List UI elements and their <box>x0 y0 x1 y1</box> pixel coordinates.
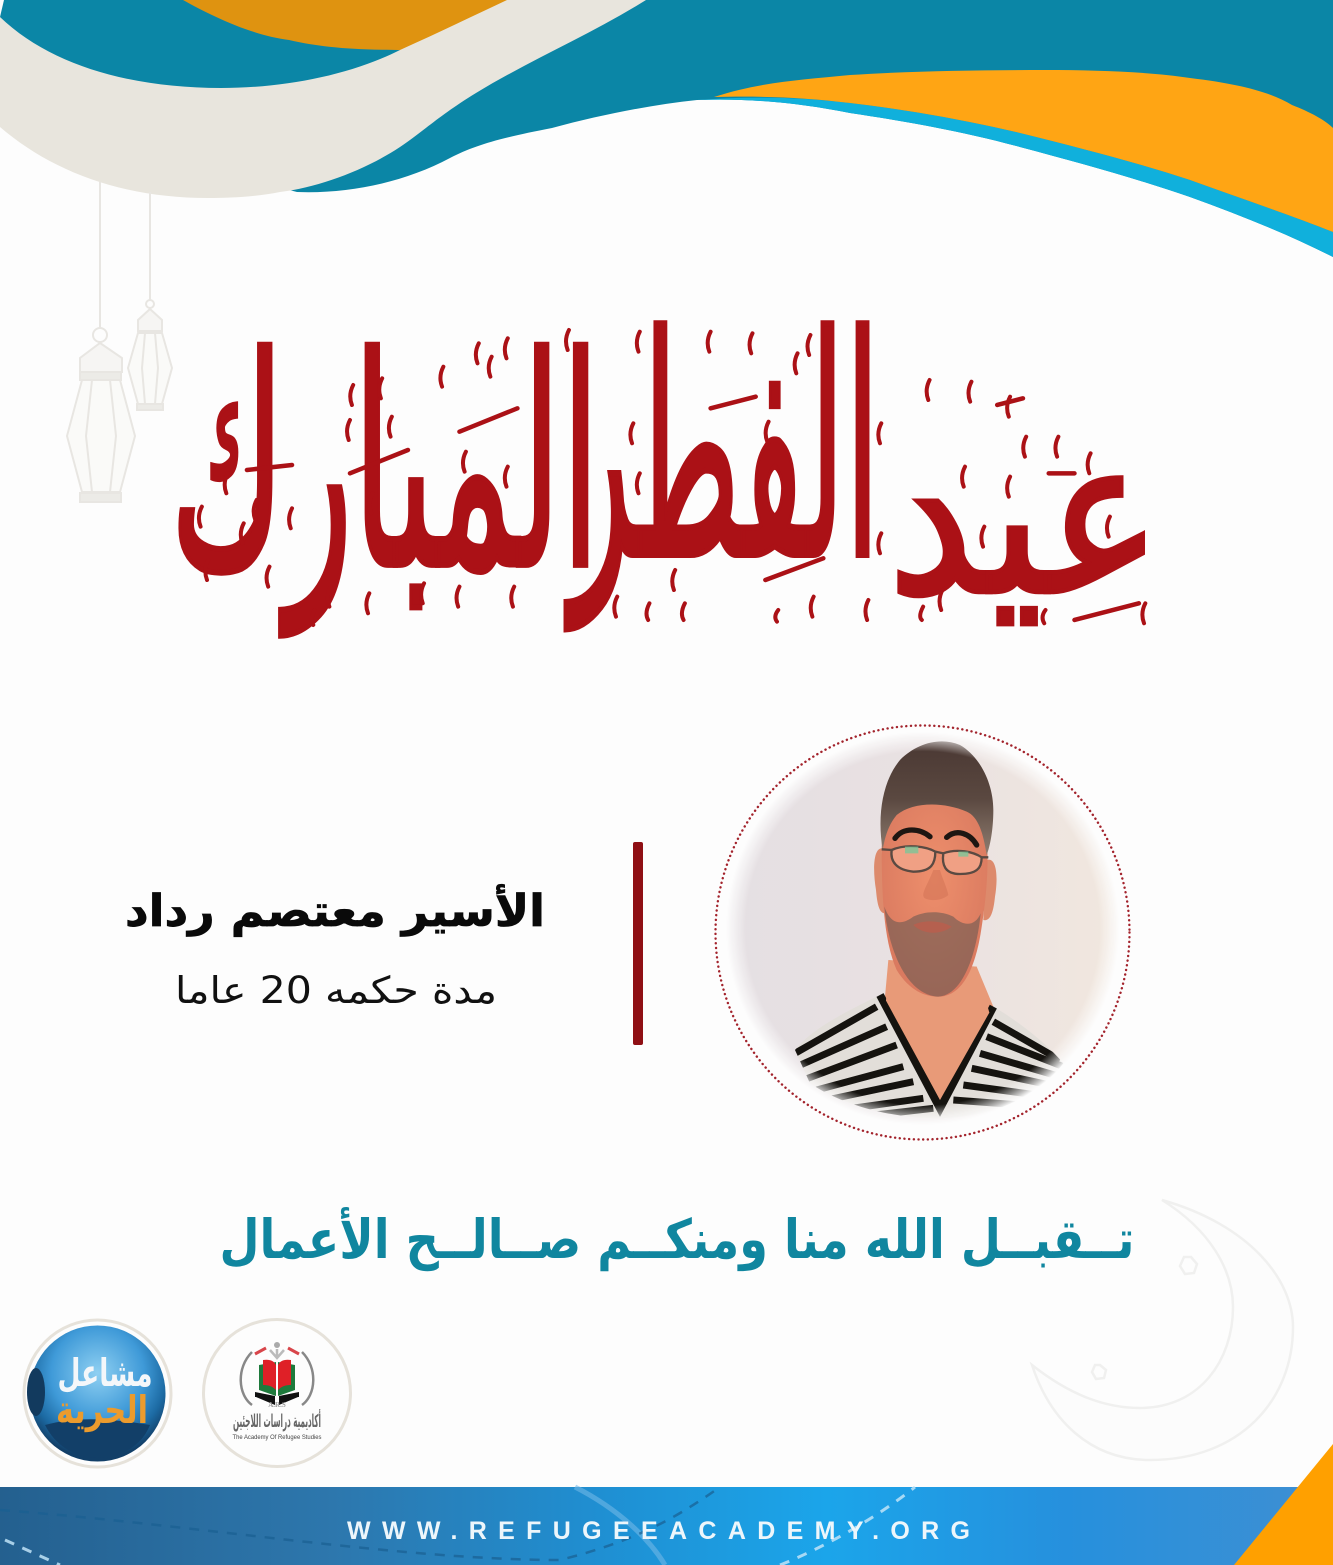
top wave: teal body <box>0 0 1333 257</box>
top wave: corner sliver <box>0 0 4 17</box>
word: al-fitr: الفطر <box>564 271 880 630</box>
title ornament marks <box>199 330 1145 625</box>
glasses <box>882 846 988 874</box>
logo: academy of refugee studies: A.R.S <box>268 1401 286 1409</box>
word: al-mubarak: المبارك <box>170 298 600 636</box>
glasses glints <box>905 847 968 857</box>
top wave: cyan ribbon <box>697 98 1333 257</box>
portrait photo <box>731 737 1114 1120</box>
crescent watermark <box>1032 1200 1293 1460</box>
divider bar <box>633 842 643 1045</box>
shirt <box>795 997 1063 1116</box>
logo: freedom torches: الحرية <box>56 1388 148 1432</box>
prisoner name: الأسير معتصم رداد <box>125 884 545 937</box>
logo: academy of refugee studies: أكاديمية دراسات اللاجئين <box>233 1409 321 1432</box>
face <box>882 797 988 997</box>
ears <box>874 848 885 913</box>
website address: WWW.REFUGEEACADEMY.ORG <box>347 1517 970 1545</box>
logo: freedom torches <box>24 1320 171 1467</box>
word: eid: عيد <box>888 389 1162 645</box>
footer corner triangle <box>1234 1444 1333 1565</box>
logo: academy of refugee studies <box>204 1320 350 1466</box>
sentence duration: مدة حكمه 20 عاما <box>175 969 497 1012</box>
closing greeting: تــقبــل الله منا ومنكــم صــالــح الأعمال <box>220 1207 1134 1271</box>
neck <box>885 960 993 1108</box>
lanterns <box>67 182 172 502</box>
hair <box>880 741 993 855</box>
photo background <box>731 737 1114 1120</box>
collar <box>880 995 993 1108</box>
beard <box>884 907 981 997</box>
mouth <box>913 921 952 933</box>
portrait dotted ring <box>716 726 1130 1140</box>
top wave: dark orange <box>183 0 520 50</box>
eyebrows <box>895 830 977 845</box>
logo: freedom torches: مشاعل <box>58 1351 152 1395</box>
footer band <box>0 1487 1333 1565</box>
title calligraphy <box>170 271 1162 645</box>
top wave: orange ribbon <box>714 70 1333 232</box>
nose <box>923 870 948 900</box>
top wave: beige band <box>0 0 646 198</box>
logo: academy of refugee studies: The Academy Of Refugee Studies <box>232 1435 322 1441</box>
